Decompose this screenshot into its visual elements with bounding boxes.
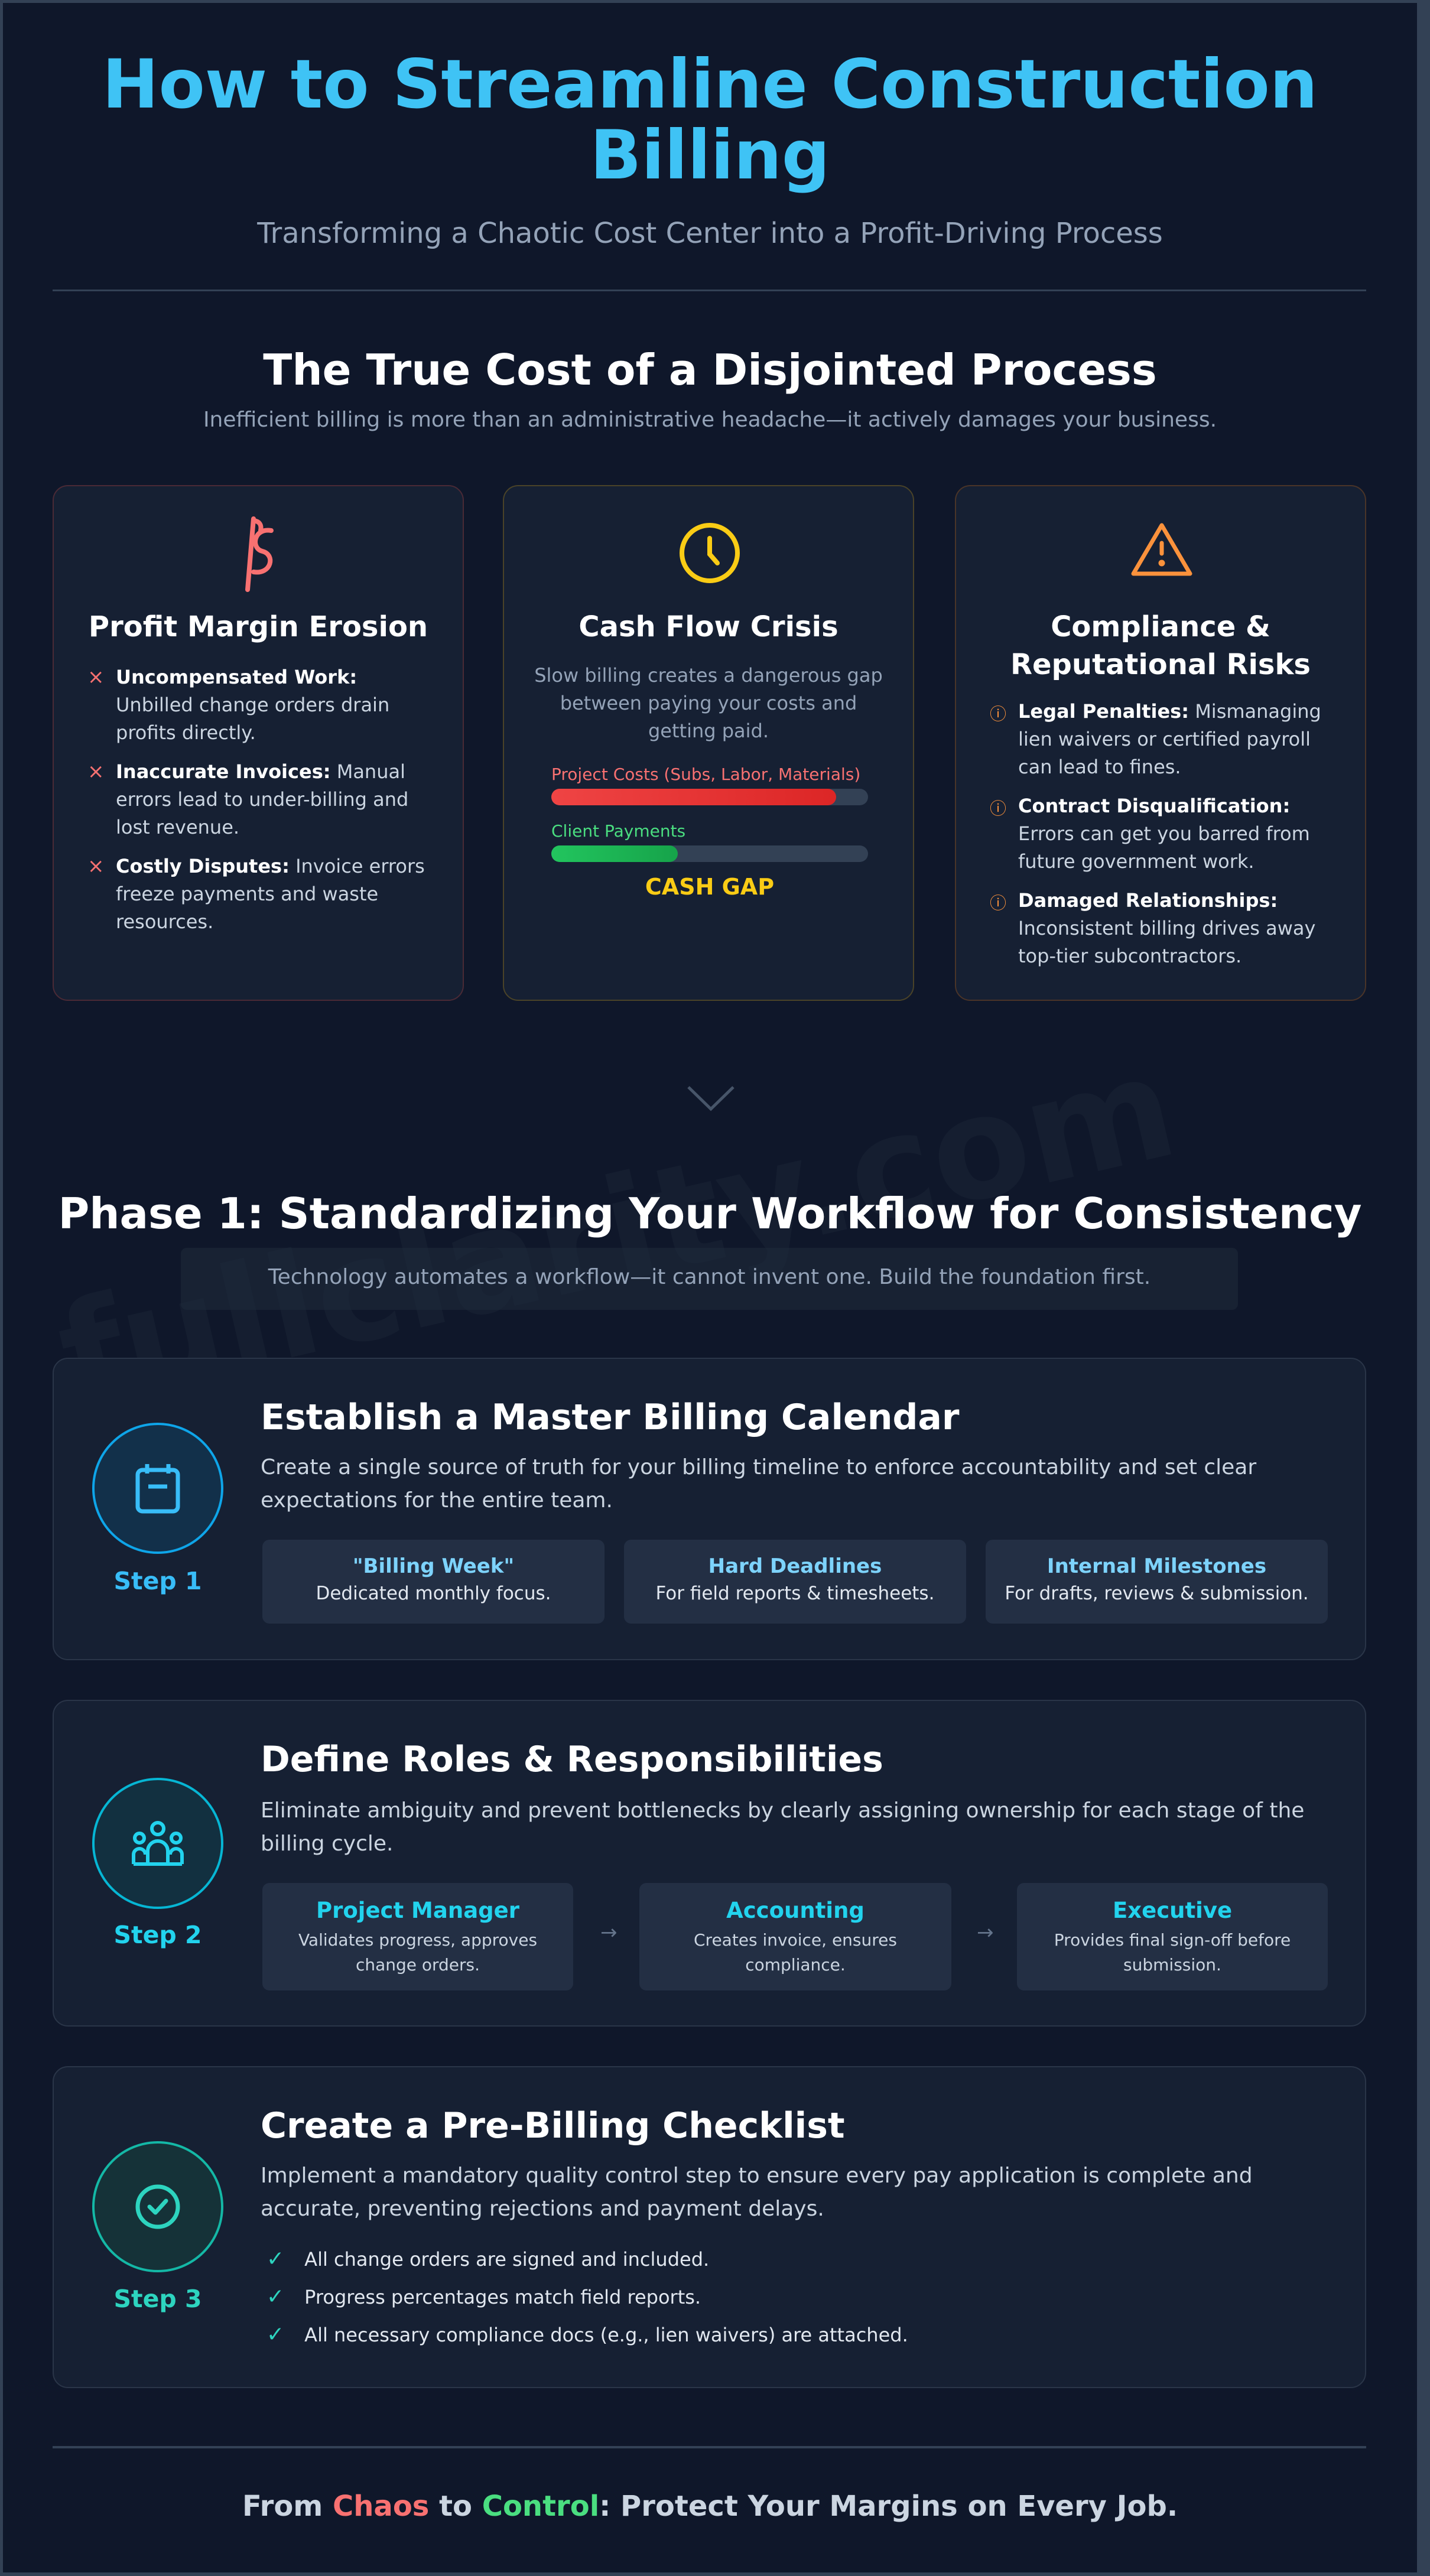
box: accounting: compliance. bbox=[745, 1955, 846, 1975]
card title: Reputational Risks bbox=[1010, 648, 1311, 681]
step heading: Create a Pre-Billing Checklist bbox=[261, 2105, 845, 2146]
box: executive bbox=[1017, 1883, 1328, 1990]
phase 1 subheading bbox=[181, 1248, 1238, 1310]
box: billing week: "Billing Week" bbox=[353, 1554, 514, 1578]
box: hard deadlines: Hard Deadlines bbox=[708, 1554, 882, 1578]
panel: compliance risks: ⓘ bbox=[990, 799, 1006, 818]
step description: Create a single source of truth for your billing timeline to enforce accountability and set clear expectations for the entire team. bbox=[261, 1455, 1256, 1513]
checklist: ✓ All change orders are signed and included. bbox=[266, 2247, 709, 2271]
list item: Uncompensated Work: Unbilled change orders drain profits directly. bbox=[116, 666, 389, 744]
subtitle: Transforming a Chaotic Cost Center into a Profit-Driving Process bbox=[257, 217, 1163, 250]
title bbox=[102, 45, 1318, 194]
panel: profit margin erosion: × bbox=[87, 760, 104, 783]
list item: Legal Penalties: Mismanaging lien waivers or certified payroll can lead to fines. bbox=[1018, 700, 1321, 778]
list item: Contract Disqualification: Errors can get you barred from future government work. bbox=[1018, 795, 1310, 873]
bar chart: cash gap: CASH GAP bbox=[645, 874, 774, 900]
icon: calendar circle bbox=[92, 1423, 223, 1554]
arrow: chevron down bbox=[687, 1086, 734, 1111]
bar chart: cash gap bbox=[551, 765, 868, 900]
step description: Eliminate ambiguity and prevent bottlenecks by clearly assigning ownership for each stage of the billing cycle. bbox=[261, 1798, 1304, 1856]
watermark: fullclarity.com bbox=[44, 1023, 1190, 1440]
description: Slow billing creates a dangerous gap between paying your costs and getting paid. bbox=[534, 664, 883, 742]
panel: profit margin erosion bbox=[53, 485, 464, 1001]
box: project manager bbox=[262, 1883, 573, 1990]
box: internal milestones: Internal Milestones bbox=[1047, 1554, 1266, 1578]
icon: check circle bbox=[92, 2141, 223, 2272]
footer: From Chaos to Control: Protect Your Margins on Every Job. bbox=[242, 2490, 1178, 2523]
list item: Inaccurate Invoices: Manual errors lead to under-billing and lost revenue. bbox=[116, 760, 408, 838]
step label: Step 3 bbox=[113, 2285, 202, 2313]
panel: compliance risks: ⓘ bbox=[990, 704, 1006, 724]
list item: Costly Disputes: Invoice errors freeze payments and waste resources. bbox=[116, 855, 425, 933]
box: internal milestones: For drafts, reviews & submission. bbox=[1005, 1583, 1309, 1604]
box: project manager: Project Manager bbox=[316, 1898, 519, 1923]
step label: Step 1 bbox=[113, 1567, 202, 1595]
bar chart: cash gap: Project Costs (Subs, Labor, Materials) bbox=[551, 765, 860, 784]
panel: cash flow crisis bbox=[503, 485, 914, 1001]
panel: step 1 bbox=[53, 1358, 1366, 1660]
panel: step 3 bbox=[53, 2066, 1366, 2388]
card title: Compliance & bbox=[1051, 610, 1270, 643]
section subheading: Inefficient billing is more than an administrative headache—it actively damages your business. bbox=[203, 408, 1217, 432]
arrow: → bbox=[977, 1921, 994, 1944]
title: Billing bbox=[590, 116, 830, 194]
step heading: Establish a Master Billing Calendar bbox=[261, 1397, 959, 1438]
box: accounting bbox=[639, 1883, 951, 1990]
step description: Implement a mandatory quality control step to ensure every pay application is complete and accurate, preventing rejections and payment delays. bbox=[261, 2164, 1253, 2221]
box: hard deadlines bbox=[624, 1540, 966, 1624]
step heading: Define Roles & Responsibilities bbox=[261, 1739, 883, 1780]
checklist bbox=[266, 2247, 908, 2347]
checklist: ✓ Progress percentages match field reports. bbox=[266, 2285, 701, 2309]
title: How to Streamline Construction bbox=[102, 45, 1318, 123]
box: executive: Provides final sign-off before bbox=[1054, 1930, 1291, 1950]
box: accounting: Creates invoice, ensures bbox=[694, 1930, 897, 1950]
bar chart: cash gap: Client Payments bbox=[551, 821, 685, 841]
arrow: → bbox=[600, 1921, 617, 1944]
section heading: true cost: The True Cost of a Disjointed Process bbox=[263, 345, 1157, 395]
checklist: ✓ All necessary compliance docs (e.g., lien waivers) are attached. bbox=[266, 2323, 908, 2347]
box: project manager: change orders. bbox=[356, 1955, 480, 1975]
list item: Damaged Relationships: Inconsistent billing drives away top-tier subcontractors. bbox=[1018, 889, 1315, 967]
card title: Cash Flow Crisis bbox=[578, 610, 838, 643]
box: accounting: Accounting bbox=[726, 1898, 864, 1923]
box: executive: Executive bbox=[1113, 1898, 1232, 1923]
icon: clock bbox=[680, 523, 740, 583]
box: billing week: Dedicated monthly focus. bbox=[316, 1583, 551, 1604]
box: project manager: Validates progress, approves bbox=[298, 1930, 537, 1950]
phase 1 heading: Phase 1: Standardizing Your Workflow for Consistency bbox=[58, 1189, 1362, 1238]
panel: profit margin erosion: × bbox=[87, 854, 104, 878]
box: billing week bbox=[262, 1540, 604, 1624]
card title bbox=[1010, 610, 1311, 681]
card title: Profit Margin Erosion bbox=[89, 610, 428, 643]
panel: step 2 bbox=[53, 1700, 1366, 2027]
panel: profit margin erosion: × bbox=[87, 665, 104, 689]
box: hard deadlines: For field reports & timesheets. bbox=[656, 1583, 934, 1604]
box: internal milestones bbox=[986, 1540, 1328, 1624]
panel: compliance risks bbox=[955, 485, 1366, 1001]
step label: Step 2 bbox=[113, 1921, 202, 1949]
icon: warning bbox=[1131, 523, 1192, 575]
phase 1 subheading: Technology automates a workflow—it cannot invent one. Build the foundation first. bbox=[268, 1265, 1150, 1289]
panel: compliance risks: ⓘ bbox=[990, 893, 1006, 913]
box: executive: submission. bbox=[1123, 1955, 1221, 1975]
icon: dollar bbox=[245, 516, 274, 592]
icon: team circle bbox=[92, 1778, 223, 1909]
